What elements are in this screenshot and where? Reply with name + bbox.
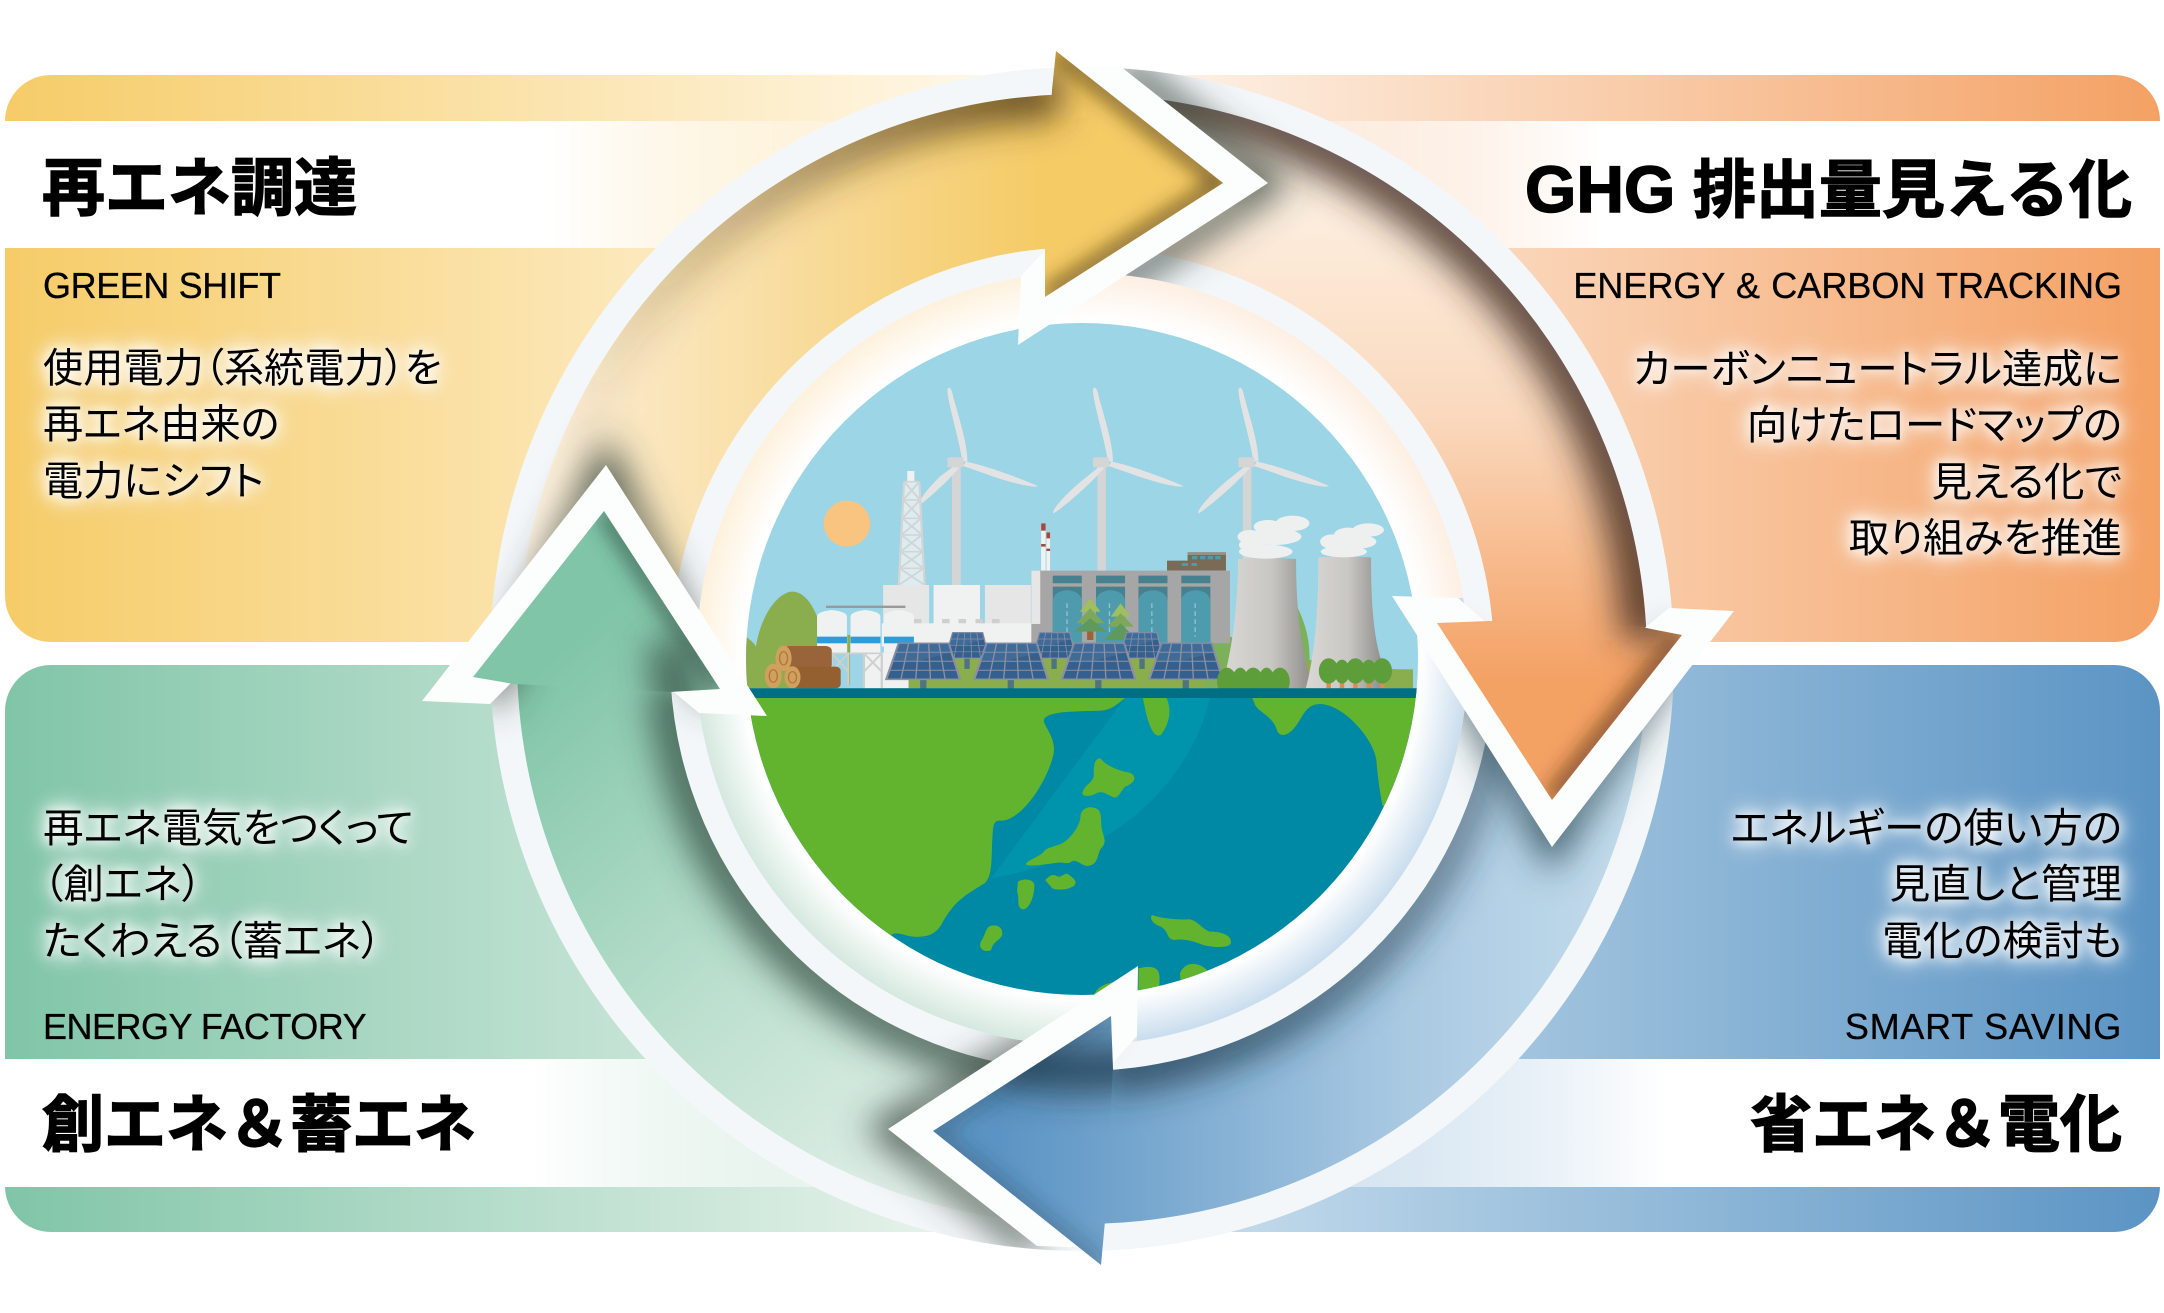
icon: wind turbine 2 bbox=[1053, 388, 1184, 573]
panel: GREEN SHIFT background bbox=[5, 75, 1105, 642]
chimneys bbox=[1041, 523, 1050, 571]
scene: power plant landscape bbox=[743, 388, 1413, 696]
panel: ENERGY & CARBON TRACKING background bbox=[1060, 75, 2160, 642]
text block: green shift description: 使用電力（系統電力）を bbox=[43, 346, 442, 391]
text block: carbon tracking description: 取り組みを推進 bbox=[1849, 515, 2122, 561]
heading: 省エネ&電化: 省エネ＆電化 bbox=[1750, 1091, 2122, 1160]
cooling tower 2 with steam bbox=[1306, 523, 1384, 688]
icon: sun bbox=[824, 501, 870, 547]
map: globe with Japan bbox=[726, 688, 1435, 1012]
text block: carbon tracking description: カーボンニュートラル達成に bbox=[1633, 346, 2122, 392]
text block: smart saving description bbox=[1724, 792, 2138, 976]
arrow shaft: green bbox=[518, 684, 992, 1213]
text block: green shift description bbox=[30, 332, 448, 516]
arrow shaft: orange bbox=[1159, 100, 1646, 628]
text block: smart saving description: エネルギーの使い方の bbox=[1731, 805, 2122, 851]
logs bbox=[765, 646, 841, 688]
solar panels back row bbox=[945, 633, 1163, 669]
text block: energy factory description: 再エネ電気をつくって bbox=[43, 805, 414, 851]
tree clusters bbox=[1217, 658, 1413, 696]
arrowhead: orange bbox=[1392, 480, 1734, 847]
cooling tower 1 with steam bbox=[1221, 516, 1313, 688]
text block: carbon tracking description: 見える化で bbox=[1931, 459, 2122, 505]
brown control building bbox=[1167, 552, 1226, 571]
text block: energy factory description: たくわえる（蓄エネ） bbox=[43, 918, 381, 964]
text block: smart saving description: 電化の検討も bbox=[1882, 918, 2122, 964]
silos bbox=[817, 606, 914, 688]
grey dam-like plant building bbox=[1031, 571, 1230, 643]
text block: smart saving description: 見直しと管理 bbox=[1890, 861, 2122, 907]
shadow: yellow arrowhead over orange tail bbox=[1060, 66, 1268, 320]
arrow shaft: yellow bbox=[524, 94, 1052, 578]
icon: wind turbine 3 bbox=[1198, 388, 1329, 573]
text block: energy factory description bbox=[30, 793, 418, 974]
label: GREEN SHIFT: GREEN SHIFT bbox=[43, 265, 281, 306]
arrowhead: yellow bbox=[800, 51, 1268, 345]
pine trees bbox=[1074, 598, 1137, 640]
text block: green shift description: 再エネ由来の bbox=[43, 402, 279, 447]
label: ENERGY & CARBON TRACKING: ENERGY & CARBON TRACKING bbox=[1573, 265, 2122, 306]
shadow: orange arrowhead over blue tail bbox=[1440, 640, 1680, 847]
text block: carbon tracking description bbox=[1628, 334, 2136, 573]
heading: GHG 排出量見える化: GHG 排出量見える化 bbox=[1525, 152, 2132, 226]
text block: energy factory description: （創エネ） bbox=[43, 861, 202, 907]
shadow: green arrowhead over yellow tail bbox=[490, 465, 715, 700]
inner rim fades bbox=[690, 260, 1477, 1058]
icon: wind turbine 1 bbox=[919, 388, 1038, 587]
text block: green shift description: 電力にシフト bbox=[43, 459, 264, 504]
text block: carbon tracking description: 向けたロードマップの bbox=[1747, 402, 2122, 448]
solar panels front row bbox=[886, 643, 1223, 689]
globe illustration bbox=[726, 320, 1435, 1012]
panel: ENERGY FACTORY background bbox=[5, 665, 1105, 1232]
heading: 創エネ&蓄エネ: 創エネ＆蓄エネ bbox=[42, 1091, 476, 1160]
shadow: blue arrowhead over green tail bbox=[888, 1010, 1100, 1246]
arrow shaft: blue bbox=[1100, 720, 1644, 1224]
white ring base bbox=[490, 67, 1674, 1251]
lattice tower bbox=[899, 471, 925, 585]
hills bbox=[743, 592, 1413, 688]
heading: 再エネ調達: 再エネ調達 bbox=[42, 154, 357, 224]
arrowhead: green bbox=[422, 465, 767, 880]
white factory buildings bbox=[882, 585, 1042, 647]
panel: SMART SAVING background bbox=[1060, 665, 2160, 1232]
label: SMART SAVING: SMART SAVING bbox=[1845, 1006, 2122, 1047]
label: ENERGY FACTORY: ENERGY FACTORY bbox=[43, 1006, 366, 1047]
arrowhead: blue bbox=[888, 966, 1250, 1265]
